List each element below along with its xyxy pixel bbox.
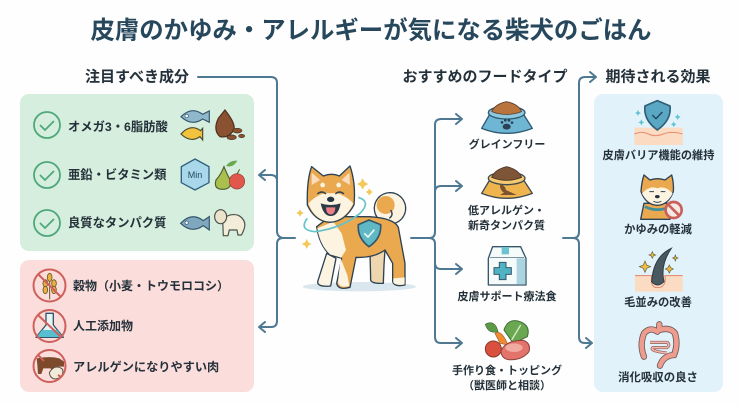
food type: therapeutic diet: 皮膚サポート療法食	[458, 289, 556, 303]
item: omega	[34, 110, 245, 140]
teal ring	[304, 197, 365, 232]
effect: reduced itching	[624, 175, 693, 236]
item: zinc and vitamins: 亜鉛・ビタミン類	[68, 167, 167, 182]
effect: digestion: 消化吸収の良さ	[618, 370, 698, 384]
arrows: effects connector	[563, 72, 596, 348]
food type: therapeutic diet	[458, 247, 556, 303]
shield	[358, 220, 381, 247]
effect: digestion	[618, 324, 698, 384]
far legs	[370, 250, 385, 283]
heading: effects: 期待される効果	[605, 68, 711, 86]
panel: recommended ingredients	[20, 94, 254, 251]
item: grains: 穀物（小麦・トウモロコシ）	[73, 278, 229, 293]
arrows: ingredients connector	[198, 77, 295, 332]
heading: ingredients: 注目すべき成分	[85, 68, 189, 86]
title: 皮膚のかゆみ・アレルギーが気になる柴犬のごはん	[90, 16, 652, 44]
food type: homemade and topping: 手作り食・トッピング	[452, 363, 562, 377]
item: zinc and vitamins	[34, 159, 245, 190]
dog head	[307, 166, 354, 222]
food type: homemade and topping	[452, 321, 562, 392]
effect: better coat	[624, 248, 692, 309]
effect: skin barrier	[603, 101, 714, 162]
panel: ingredients to avoid	[20, 260, 254, 392]
item: zinc and vitamins: Min	[188, 170, 202, 180]
food type: hypoallergenic: 新奇タンパク質	[468, 218, 545, 232]
item: quality protein: 良質なタンパク質	[68, 215, 166, 230]
tail	[374, 193, 406, 224]
food type: grain free	[469, 102, 545, 151]
illustration: shiba inu	[296, 166, 416, 291]
food type: homemade and topping: （獣医師と相談）	[463, 378, 551, 392]
item: grains	[34, 270, 229, 302]
item: additives: 人工添加物	[73, 318, 133, 333]
body	[317, 217, 405, 288]
food type: grain free: グレインフリー	[469, 137, 545, 151]
food type: hypoallergenic: 低アレルゲン・	[468, 203, 545, 217]
sparkles	[296, 178, 373, 249]
food type: hypoallergenic	[468, 167, 545, 232]
item: allergen meat	[34, 350, 219, 382]
item: omega: オメガ3・6脂肪酸	[68, 119, 168, 134]
panel: expected effects	[594, 94, 723, 392]
arrows: food type connector	[411, 114, 462, 348]
item: additives	[34, 310, 133, 342]
item: allergen meat: アレルゲンになりやすい肉	[73, 359, 219, 374]
effect: better coat: 毛並みの改善	[624, 295, 692, 309]
effect: reduced itching: かゆみの軽減	[624, 222, 693, 236]
heading: food types: おすすめのフードタイプ	[402, 68, 568, 86]
item: quality protein	[34, 210, 245, 236]
effect: skin barrier: 皮膚バリア機能の維持	[603, 148, 714, 162]
